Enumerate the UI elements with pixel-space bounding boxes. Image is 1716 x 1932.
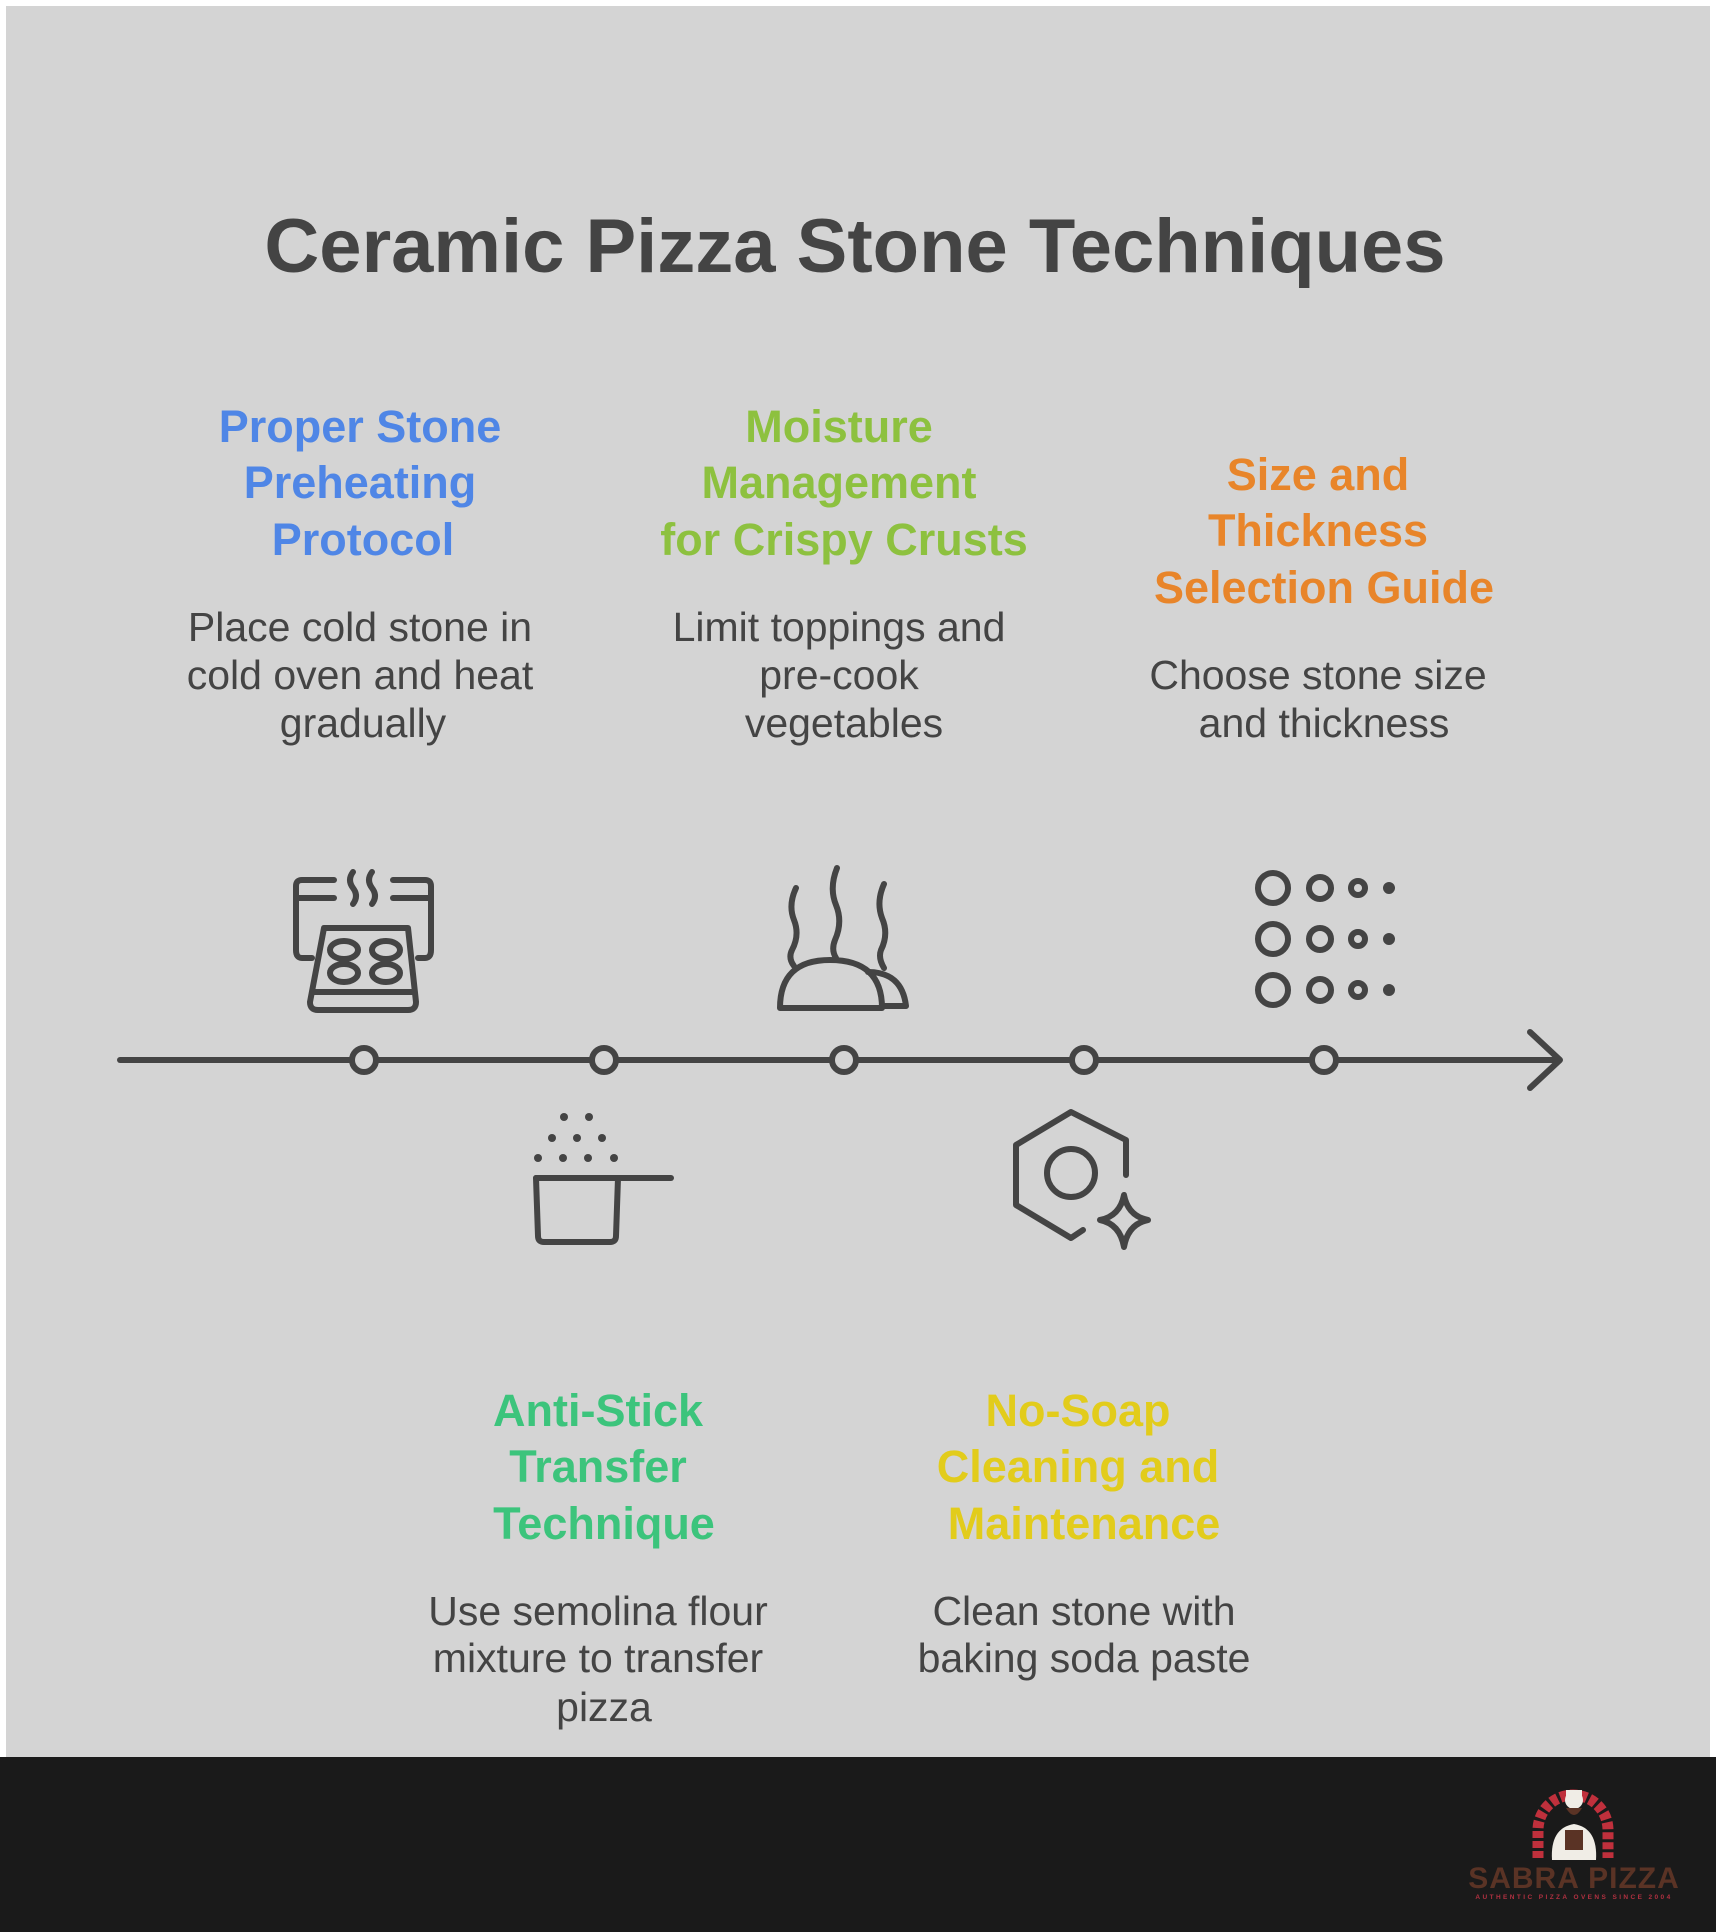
step 4: No-Soap Cleaning: baking soda paste <box>918 1635 1250 1681</box>
logo: Sabra Pizza: AUTHENTIC PIZZA OVENS SINCE 2004 <box>1475 1894 1673 1901</box>
step 3: Moisture Management: Management <box>701 457 977 508</box>
icon: size dots grid <box>1258 873 1392 1005</box>
step 5: Size and Thickness <box>1149 449 1494 746</box>
step 2: Anti-Stick Transfer: Transfer <box>509 1441 687 1492</box>
step 3: Moisture Management: Moisture <box>745 401 933 452</box>
step 4: No-Soap Cleaning: Maintenance <box>948 1498 1220 1549</box>
icon: measuring cup with flour <box>534 1113 671 1242</box>
timeline arrow <box>120 1032 1560 1088</box>
step 5: Size and Thickness: Size and <box>1227 449 1409 500</box>
step 3: Moisture Management: vegetables <box>745 700 943 746</box>
step 4: No-Soap Cleaning: Cleaning and <box>937 1441 1219 1492</box>
step 2: Anti-Stick Transfer: pizza <box>556 1684 652 1730</box>
step 5: Size and Thickness: Thickness <box>1208 505 1428 556</box>
step 2: Anti-Stick Transfer: Anti-Stick <box>493 1385 704 1436</box>
step 3: Moisture Management: pre-cook <box>759 652 919 698</box>
icon: clean hex plate with sparkle <box>1016 1112 1148 1247</box>
step 1: Proper Stone Preheating Protocol: gradually <box>280 700 447 746</box>
logo: Sabra Pizza <box>1468 1790 1680 1901</box>
icon: oven with tray <box>296 872 431 1010</box>
step 3: Moisture Management: Limit toppings and <box>673 604 1005 650</box>
step 2: Anti-Stick Transfer: mixture to transfer <box>433 1635 763 1681</box>
step 4: No-Soap Cleaning <box>918 1385 1250 1681</box>
step 2: Anti-Stick Transfer <box>428 1385 768 1730</box>
step 3: Moisture Management: for Crispy Crusts <box>660 514 1028 565</box>
logo: Sabra Pizza: SABRA PIZZA <box>1468 1862 1680 1895</box>
footer <box>0 1757 1716 1932</box>
step 4: No-Soap Cleaning: Clean stone with <box>932 1588 1236 1634</box>
step 3: Moisture Management <box>660 401 1028 746</box>
step 1: Proper Stone Preheating Protocol: cold oven and heat <box>187 652 534 698</box>
icon: steaming bowl <box>780 868 906 1008</box>
step 1: Proper Stone Preheating Protocol: Place cold stone in <box>188 604 532 650</box>
step 2: Anti-Stick Transfer: Use semolina flour <box>428 1588 768 1634</box>
step 2: Anti-Stick Transfer: Technique <box>493 1498 715 1549</box>
step 1: Proper Stone Preheating Protocol: Protocol <box>272 514 454 565</box>
step 1: Proper Stone Preheating Protocol <box>187 401 534 746</box>
title: Ceramic Pizza Stone Techniques <box>264 204 1446 289</box>
step 1: Proper Stone Preheating Protocol: Proper Stone <box>219 401 501 452</box>
step 4: No-Soap Cleaning: No-Soap <box>986 1385 1170 1436</box>
step 5: Size and Thickness: Selection Guide <box>1154 562 1494 613</box>
step 5: Size and Thickness: and thickness <box>1199 700 1449 746</box>
step 5: Size and Thickness: Choose stone size <box>1149 652 1487 698</box>
step 1: Proper Stone Preheating Protocol: Preheating <box>244 457 476 508</box>
